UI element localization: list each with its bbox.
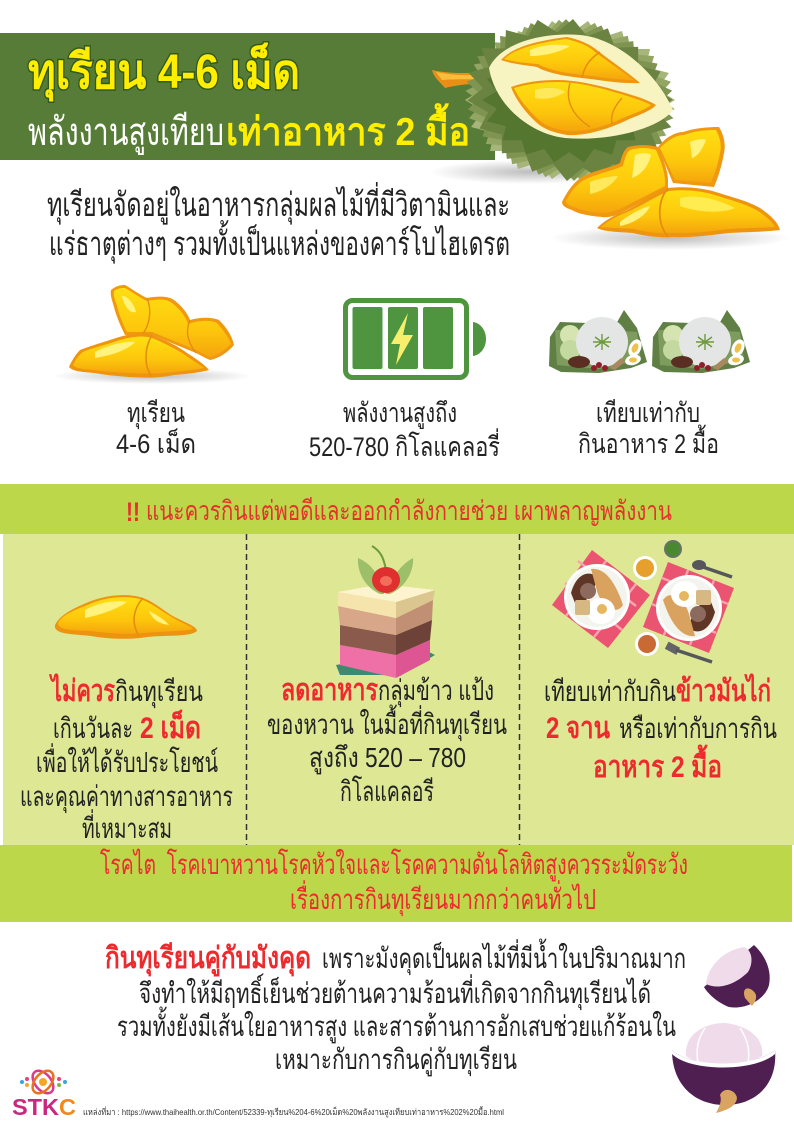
label: durian: ทุเรียน xyxy=(127,398,185,430)
icon: battery xyxy=(346,300,486,378)
intro text: แร่ธาตุต่างๆ รวมทั้งเป็นแหล่งของคาร์โบไฮเดรต xyxy=(49,220,510,264)
icon: layered cake with cherry xyxy=(336,546,435,678)
warning band: เรื่องการกินทุเรียนมากกว่าคนทั่วไป xyxy=(290,880,596,917)
label: meal equivalent: เทียบเท่ากับ xyxy=(596,398,700,428)
column 3 text: อาหาร 2 มื้อ xyxy=(593,744,722,784)
title line 1: ทุเรียน 4-6 เม็ด xyxy=(28,42,300,102)
column 1 text: ที่เหมาะสม xyxy=(82,809,172,844)
advice band: !! xyxy=(126,497,140,527)
advice band xyxy=(0,484,794,534)
column 2 text: ลดอาหาร xyxy=(281,674,378,707)
label: durian: 4-6 เม็ด xyxy=(116,426,196,459)
label: durian xyxy=(116,398,196,459)
column 1 text: และคุณค่าทางสารอาหาร xyxy=(20,781,233,814)
label: energy xyxy=(309,398,500,462)
closing text: eat durian with mangosteen: กินทุเรียนคู่กับมังคุด xyxy=(105,942,311,977)
warning band xyxy=(0,845,792,922)
column 2 text: ของหวาน ในมื้อที่กินทุเรียน xyxy=(267,704,507,742)
header banner xyxy=(0,33,495,160)
column dividers xyxy=(246,534,520,845)
source line: แหล่งที่มา : https://www.thaihealth.or.th/Content/52339-ทุเรียน%204-6%20เม็ด%20พลังงานสูงเทียบเท่าอาหาร%202%20มื้อ.html xyxy=(83,1106,504,1118)
icon: two plates of chicken rice xyxy=(552,540,734,662)
icon: mangosteen whole xyxy=(672,1023,775,1113)
column 3 text xyxy=(544,673,777,784)
title line 2: พลังงานสูงเทียบ xyxy=(28,111,224,155)
label: energy: 520-780 กิโลแคลอรี่ xyxy=(309,428,500,462)
closing text: eat durian with mangosteen: เหมาะกับการกินคู่กับทุเรียน xyxy=(275,1044,517,1077)
intro text: ทุเรียนจัดอยู่ในอาหารกลุ่มผลไม้ที่มีวิตามินและ xyxy=(47,182,510,225)
title line 2: เท่าอาหาร 2 มื้อ xyxy=(226,103,470,154)
column 2 text: กิโลแคลอรี xyxy=(340,775,434,807)
column 1 text: เพื่อให้ได้รับประโยชน์ xyxy=(36,743,218,778)
illustration: whole durian xyxy=(430,0,692,203)
logo: STKC xyxy=(12,1067,76,1120)
column 1 text: กินทุเรียน xyxy=(115,676,203,709)
column 3 text: เทียบเท่ากับกิน xyxy=(544,676,676,707)
column 2 text: สูงถึง 520 – 780 xyxy=(309,742,466,775)
label: energy: พลังงานสูงถึง xyxy=(343,398,457,429)
label: meal equivalent: กินอาหาร 2 มื้อ xyxy=(578,424,719,459)
column 2 text xyxy=(267,674,507,807)
illustration: durian pieces xyxy=(550,127,790,250)
icon: durian flesh cluster xyxy=(52,285,252,384)
column 1 text: 2 เม็ด xyxy=(140,709,201,745)
icon: mangosteen half xyxy=(704,945,770,1008)
panel: three advice columns xyxy=(3,534,794,845)
closing text: eat durian with mangosteen xyxy=(105,938,686,1077)
title line 2 xyxy=(28,103,470,155)
icon: two rice meal packets xyxy=(549,310,750,373)
column 1 text: เกินวันละ xyxy=(53,713,133,744)
column 1 text xyxy=(20,673,233,844)
column 2 text: กลุ่มข้าว แป้ง xyxy=(378,675,494,708)
logo: STKC: STKC xyxy=(12,1094,76,1120)
icon: durian flesh xyxy=(55,595,197,639)
column 1 text: ไม่ควร xyxy=(49,673,115,708)
column 3 text: 2 จาน xyxy=(546,712,610,745)
label: meal equivalent xyxy=(578,398,719,459)
intro text xyxy=(47,182,510,264)
